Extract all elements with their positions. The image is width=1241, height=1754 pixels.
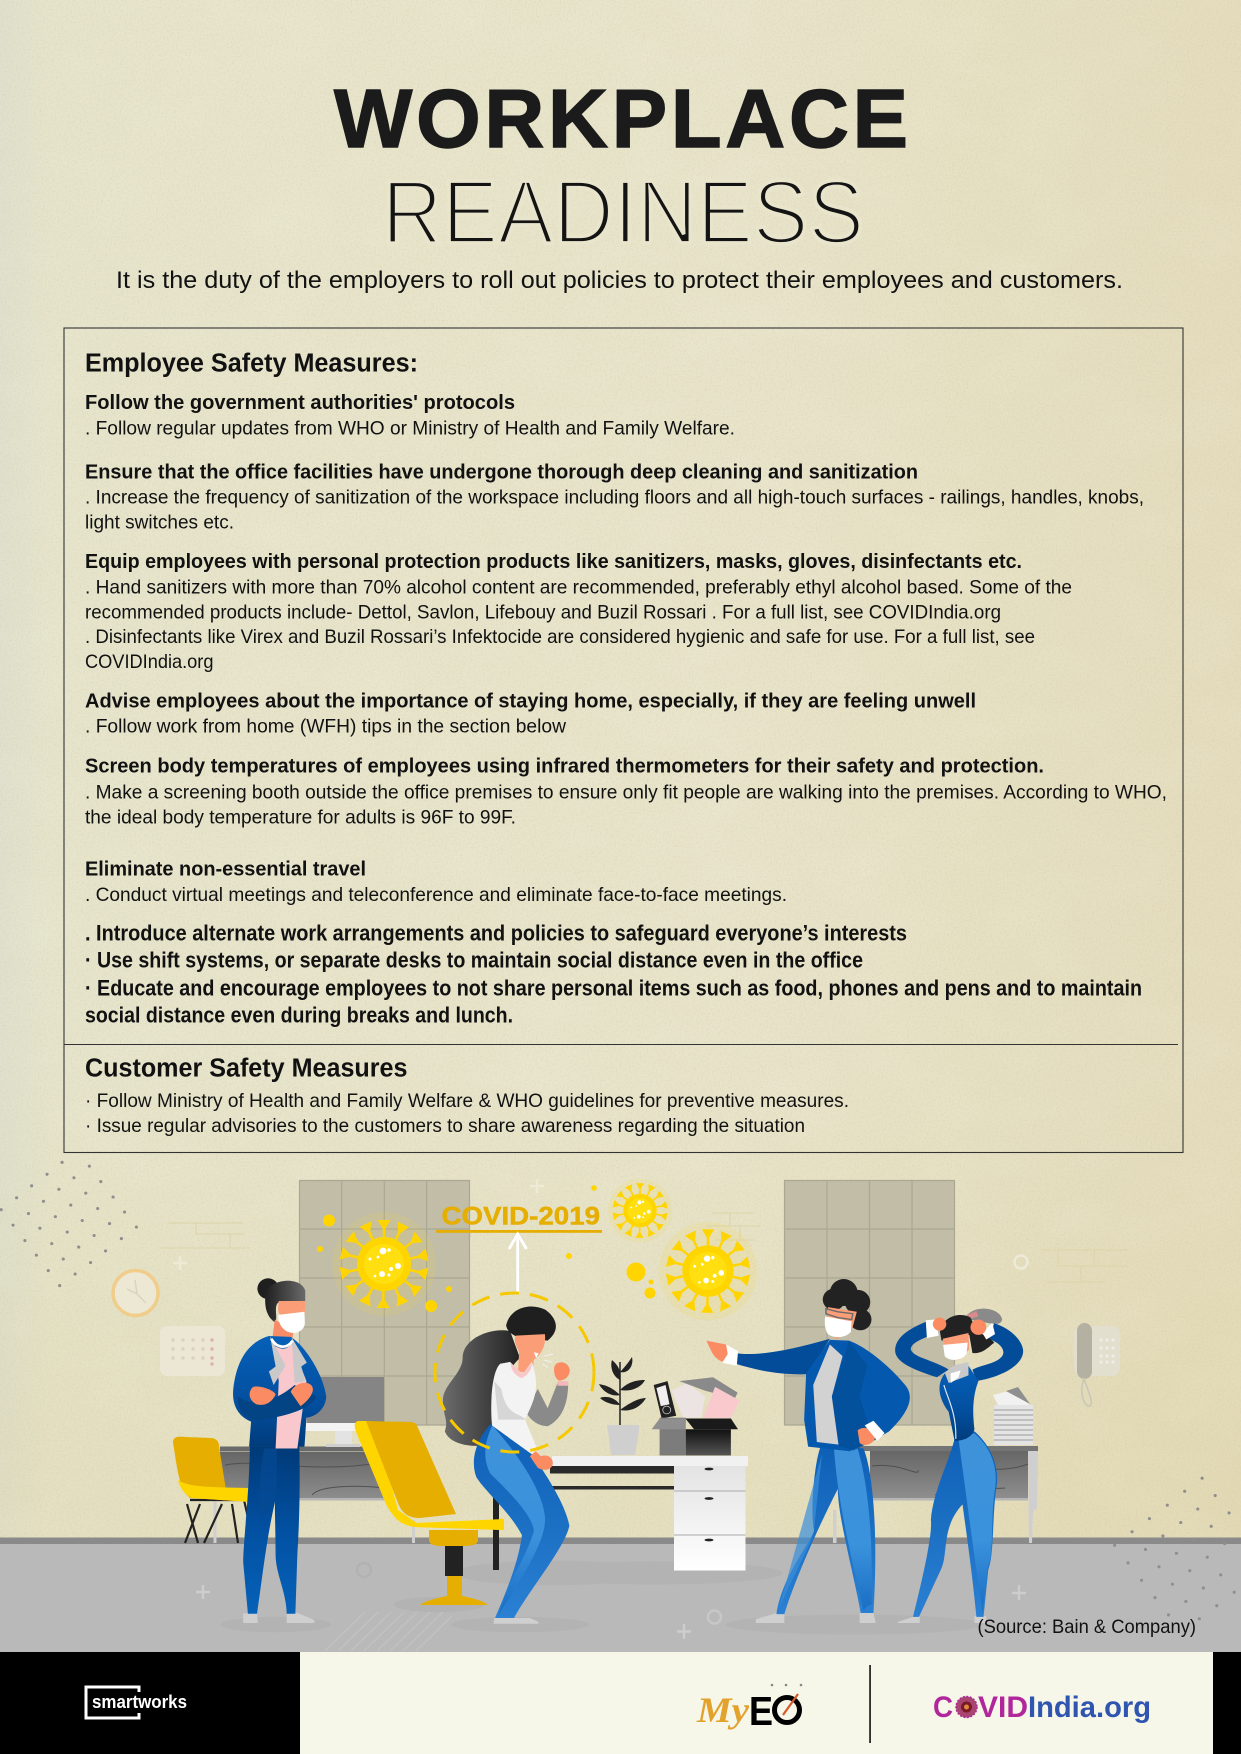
icon: wall calendar	[160, 1326, 225, 1376]
logo: myEO: E	[749, 1688, 773, 1734]
heading: customer safety measures: Customer Safety Measures	[85, 1054, 408, 1082]
wall dot cluster left	[0, 1161, 138, 1287]
text block: government protocols: Follow the government authorities' protocols	[85, 391, 515, 414]
white desk with drawers	[493, 1456, 748, 1570]
person: woman with crossed arms	[233, 1278, 326, 1623]
text block: government protocols	[85, 391, 735, 440]
floor shadows	[220, 1561, 983, 1635]
text block: alternate work arrangements: · Educate and encourage employees to not share personal items such as food, phones and pens and to maintain	[85, 976, 1142, 1000]
text block: protection products: . Hand sanitizers with more than 70% alcohol content are recommended, preferably ethyl alcohol based. Some of the	[85, 576, 1072, 598]
desktop monitor	[305, 1377, 384, 1447]
text block: body temperature screening: . Make a screening booth outside the office premises to ensure only fit people are walking into the premises. According to WHO,	[85, 782, 1167, 804]
text block: deep cleaning	[85, 460, 1144, 534]
wall and floor sparkles	[173, 1179, 1028, 1639]
text block: deep cleaning: light switches etc.	[85, 512, 234, 534]
panel: safety measures box	[64, 328, 1183, 1152]
source note: (Source: Bain & Company)	[978, 1616, 1196, 1638]
subtitle: It is the duty of the employers to roll out policies to protect their employees and customers.	[116, 267, 1123, 294]
text block: alternate work arrangements: · Use shift systems, or separate desks to maintain social distance even in the office	[85, 948, 863, 972]
text block: customer measures: · Issue regular advisories to the customers to share awareness regarding the situation	[85, 1115, 805, 1137]
text block: non-essential travel: Eliminate non-essential travel	[85, 858, 366, 880]
text block: deep cleaning: Ensure that the office facilities have undergone thorough deep cleaning and sanitization	[85, 460, 918, 484]
floating yellow particles	[317, 1185, 656, 1312]
virus right	[659, 1222, 757, 1320]
floor hatch	[325, 1612, 452, 1651]
text block: staying home	[85, 690, 976, 738]
logo: myEO: My	[696, 1690, 750, 1730]
person: woman with hands on head	[895, 1309, 1023, 1623]
text block: protection products: . Disinfectants like Virex and Buzil Rossari’s Infektocide are considered hygienic and safe for use. For a full list, see	[85, 626, 1035, 648]
logo: COVIDIndia.org: India.org	[1028, 1691, 1151, 1724]
heading: employee safety measures: Employee Safety Measures:	[85, 350, 418, 378]
title	[334, 72, 908, 263]
paper stack	[993, 1387, 1033, 1445]
title: WORKPLACE	[334, 72, 908, 165]
text block: protection products: Equip employees with personal protection products like sanitizers, masks, gloves, disinfectants etc.	[85, 550, 1022, 573]
office illustration	[0, 1161, 1236, 1651]
divider	[869, 1665, 871, 1743]
icon: wall telephone	[1074, 1323, 1120, 1406]
text block: alternate work arrangements: social distance even during breaks and lunch.	[85, 1002, 513, 1028]
big yellow chair	[355, 1421, 504, 1605]
text block: government protocols: . Follow regular updates from WHO or Ministry of Health and Family Welfare.	[85, 418, 735, 440]
covid-2019 label: COVID-2019	[442, 1202, 600, 1230]
text block: alternate work arrangements	[85, 920, 1142, 1028]
floor and wall dot cluster right	[1113, 1477, 1236, 1620]
text block: body temperature screening	[85, 754, 1167, 828]
virus left	[332, 1212, 436, 1316]
logo: myEO	[696, 1684, 802, 1734]
text block: non-essential travel	[85, 858, 787, 906]
text block: protection products	[85, 550, 1072, 673]
logo: COVIDIndia.org: VID	[978, 1691, 1028, 1724]
floor	[0, 1538, 1241, 1652]
left window	[300, 1180, 470, 1426]
file box	[652, 1377, 740, 1455]
person: man pointing	[706, 1279, 910, 1623]
dashed circle around coughing woman	[435, 1293, 594, 1452]
right window	[784, 1180, 954, 1426]
text block: body temperature screening: Screen body temperatures of employees using infrared thermometers for their safety and protection.	[85, 754, 1044, 778]
text block: body temperature screening: the ideal body temperature for adults is 96F to 99F.	[85, 806, 516, 828]
text block: customer measures: · Follow Ministry of Health and Family Welfare & WHO guidelines for preventive measures.	[85, 1090, 849, 1112]
logo: smartworks: smartworks	[92, 1692, 187, 1712]
text block: staying home: Advise employees about the importance of staying home, especially, if they are feeling unwell	[85, 690, 976, 712]
left desk	[214, 1446, 415, 1543]
logo: smartworks	[86, 1687, 187, 1718]
text block: staying home: . Follow work from home (WFH) tips in the section below	[85, 716, 567, 738]
text block: non-essential travel: . Conduct virtual meetings and teleconference and eliminate face-to-face meetings.	[85, 884, 787, 906]
potted plant	[599, 1357, 646, 1455]
person: coughing woman	[443, 1307, 570, 1624]
logo: COVIDIndia.org	[933, 1691, 1151, 1724]
virus top	[608, 1178, 672, 1243]
small yellow chair	[173, 1437, 252, 1543]
text block: customer measures	[85, 1090, 849, 1137]
title: READINESS	[382, 163, 864, 263]
icon: wall clock	[113, 1270, 158, 1316]
wall brick outlines	[160, 1213, 1128, 1282]
text block: alternate work arrangements: . Introduce alternate work arrangements and policies to safeguard everyone’s interests	[85, 920, 907, 946]
text block: protection products: recommended products include- Dettol, Savlon, Lifebouy and Buzil Rossari . For a full list, see COVIDIndia.org	[85, 602, 1001, 624]
arrow up	[509, 1234, 526, 1293]
logo: COVIDIndia.org: C	[933, 1691, 953, 1724]
right desk	[830, 1446, 1038, 1543]
text block: protection products: COVIDIndia.org	[85, 651, 214, 673]
footer band	[0, 1652, 1241, 1754]
text block: deep cleaning: . Increase the frequency of sanitization of the workspace including floors and all high-touch surfaces - railings, handles, knobs,	[85, 486, 1144, 508]
